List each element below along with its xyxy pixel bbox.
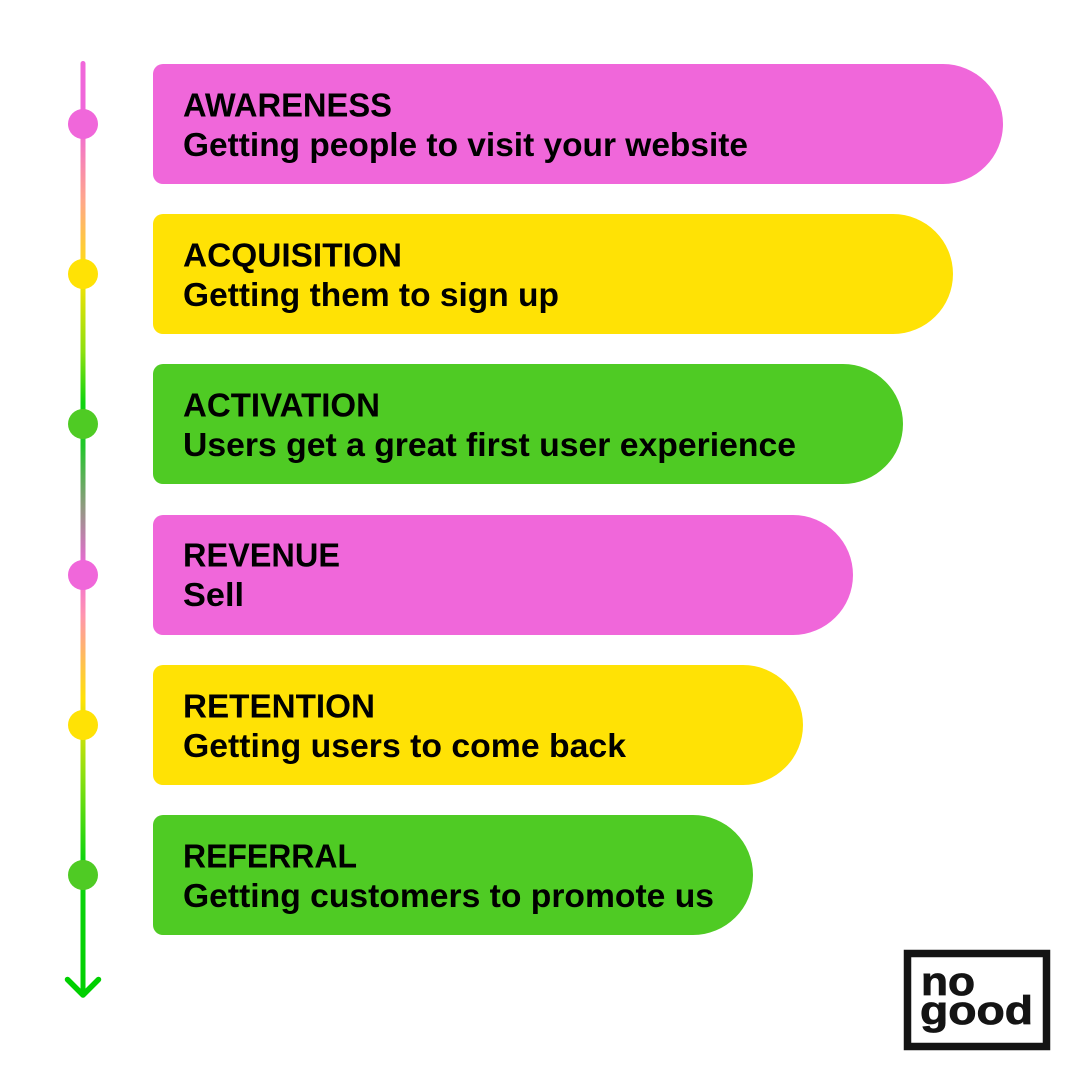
heading: awareness: AWARENESS <box>183 86 392 124</box>
arrow head <box>68 980 98 995</box>
panel: retention <box>153 665 803 785</box>
dot: referral <box>68 860 98 890</box>
dot: acquisition <box>68 259 98 289</box>
text: referral description: Getting customers to promote us <box>183 877 714 914</box>
panel: referral <box>153 815 753 935</box>
heading: activation: ACTIVATION <box>183 386 380 424</box>
heading: referral: REFERRAL <box>183 838 357 874</box>
dot: revenue <box>68 560 98 590</box>
panel: awareness <box>153 64 1003 184</box>
text: retention description: Getting users to come back <box>183 727 627 764</box>
dot: activation <box>68 409 98 439</box>
heading: revenue: REVENUE <box>183 536 340 574</box>
panel: activation <box>153 364 903 484</box>
logo: no good <box>908 954 1046 1046</box>
text: revenue description: Sell <box>183 576 244 613</box>
panel: revenue <box>153 515 853 635</box>
panel: acquisition <box>153 214 953 334</box>
text: activation description: Users get a great first user experience <box>183 426 796 463</box>
heading: retention: RETENTION <box>183 688 375 724</box>
text: acquisition description: Getting them to sign up <box>183 276 559 313</box>
timeline with dots and arrow <box>68 61 98 995</box>
logo word: good: good <box>920 989 1033 1033</box>
timeline line <box>80 61 86 994</box>
text: awareness description: Getting people to visit your website <box>183 126 748 163</box>
heading: acquisition: ACQUISITION <box>183 236 402 274</box>
dot: retention <box>68 710 98 740</box>
logo word: no: no <box>921 960 975 1004</box>
dot: awareness <box>68 109 98 139</box>
